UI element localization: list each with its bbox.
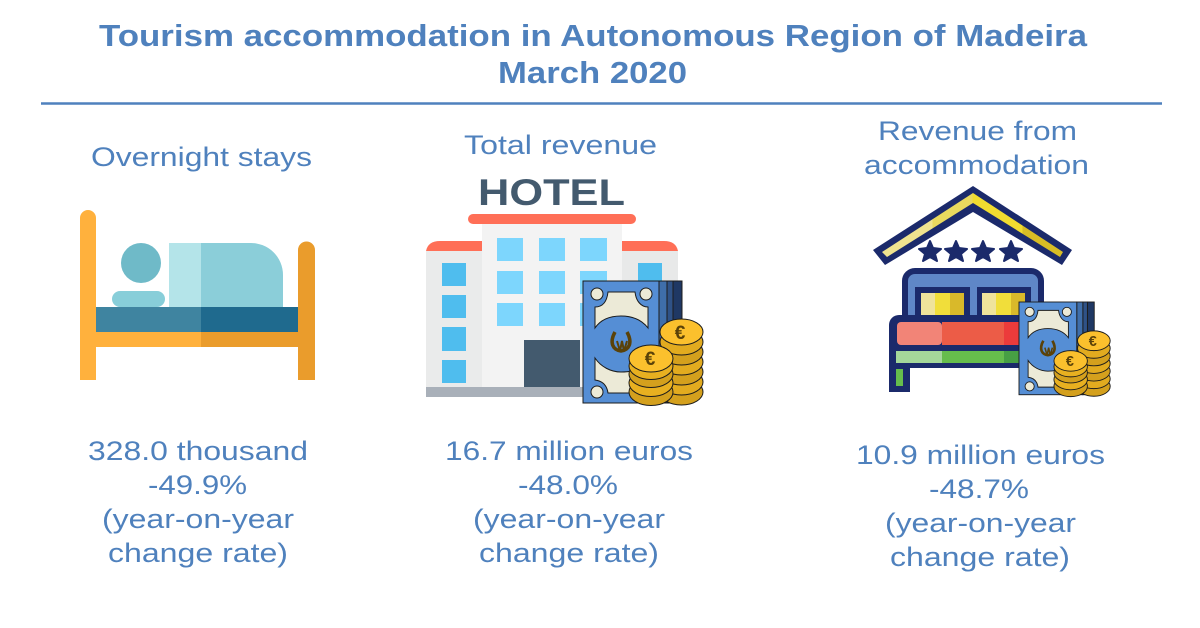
heading: revenue from accommodation (864, 116, 1089, 180)
stats: overnight stays: (year-on-year (102, 504, 294, 534)
panel: revenue from accommodation (856, 116, 1110, 572)
title: March 2020 (498, 55, 687, 90)
heading: revenue from accommodation: accommodation (864, 150, 1089, 180)
icon: banknotes and coins: € (675, 323, 686, 344)
stats: revenue from accommodation: (year-on-year (885, 508, 1076, 538)
icon: hotel building (426, 172, 678, 397)
stats: revenue from accommodation (856, 440, 1105, 572)
stats: overnight stays: 328.0 thousand (88, 436, 308, 466)
stats: revenue from accommodation: change rate) (890, 542, 1070, 572)
heading: revenue from accommodation: Revenue from (878, 116, 1077, 146)
icon: banknotes and coins: € (1089, 334, 1097, 350)
heading: total revenue: Total revenue (464, 130, 657, 160)
heading: overnight stays: Overnight stays (91, 142, 312, 172)
stats: revenue from accommodation: 10.9 million euros (856, 440, 1105, 470)
icon: banknotes and coins (1019, 302, 1110, 397)
stats: total revenue: 16.7 million euros (445, 436, 693, 466)
stats: overnight stays: change rate) (108, 538, 288, 568)
icon: banknotes and coins: € (645, 349, 656, 370)
stats: total revenue: -48.0% (518, 470, 618, 500)
icon: hotel building: HOTEL (478, 172, 625, 213)
icon: banknotes and coins (583, 281, 703, 406)
panel: overnight stays (80, 142, 315, 568)
icon: four-star hotel bed (873, 186, 1072, 392)
stats: overnight stays: -49.9% (148, 470, 247, 500)
title: Tourism accommodation in Autonomous Region of Madeira (99, 18, 1088, 53)
panel: total revenue (426, 130, 703, 568)
stats: total revenue: change rate) (479, 538, 659, 568)
stats: total revenue: (year-on-year (473, 504, 665, 534)
stats: revenue from accommodation: -48.7% (929, 474, 1029, 504)
icon: banknotes and coins: € (1066, 354, 1074, 370)
icon: person sleeping in bed (80, 210, 315, 380)
stats: total revenue (445, 436, 693, 568)
title (99, 18, 1088, 90)
stats: overnight stays (88, 436, 308, 568)
